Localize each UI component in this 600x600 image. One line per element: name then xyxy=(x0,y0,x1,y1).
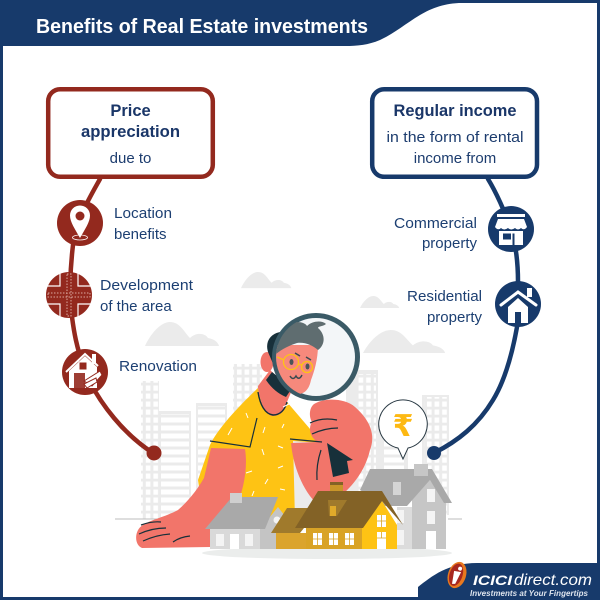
icon: shop xyxy=(488,206,534,252)
left arm xyxy=(136,448,246,548)
regular income box xyxy=(372,89,537,177)
eyebrows and mouth xyxy=(290,353,311,378)
icici logo text: ICICI xyxy=(473,572,513,588)
location benefits label: Location xyxy=(114,205,172,222)
icici logo mark xyxy=(444,559,470,591)
rupee symbol: ₹ xyxy=(393,409,413,444)
rupee speech bubble xyxy=(379,400,427,459)
head seen through lens xyxy=(276,322,326,394)
ear xyxy=(260,352,274,372)
regular income description: in the form of rental xyxy=(386,129,524,146)
right hand finger lines xyxy=(310,419,338,480)
footer banner xyxy=(418,559,600,600)
magnifying lens xyxy=(274,316,358,398)
neck xyxy=(258,370,292,416)
end dot: left xyxy=(146,446,162,460)
panel: regular income xyxy=(372,89,541,460)
commercial label line 2: property xyxy=(422,235,477,252)
collar xyxy=(258,392,287,415)
eyes xyxy=(290,359,310,370)
icon: crossroads xyxy=(46,272,92,318)
icon: renovation xyxy=(62,349,108,395)
shirt flecks xyxy=(228,404,304,496)
hair behind lens xyxy=(267,332,290,366)
illustration: person with magnifying glass xyxy=(136,316,452,559)
development label: Development xyxy=(100,277,194,294)
connector line: right xyxy=(434,179,518,453)
shirt xyxy=(198,388,322,530)
header banner xyxy=(0,0,600,46)
regular income description line 2: income from xyxy=(414,150,496,167)
title: Benefits of Real Estate investments xyxy=(36,16,368,38)
dark arm shadow xyxy=(327,443,353,477)
right sleeve edge xyxy=(290,439,322,442)
left hand finger lines xyxy=(139,522,190,542)
background city buildings xyxy=(115,364,462,520)
glasses xyxy=(277,354,312,372)
regular income heading: Regular income xyxy=(394,102,516,120)
illustration: gray house left xyxy=(205,493,288,549)
left sleeve edge xyxy=(210,418,257,447)
due to text: due to xyxy=(110,150,151,167)
icon: house xyxy=(495,281,541,327)
commercial label: Commercial xyxy=(394,215,477,232)
residential label line 2: property xyxy=(427,309,482,326)
location benefits label line 2: benefits xyxy=(114,226,167,243)
logo tagline: Investments at Your Fingertips xyxy=(470,589,589,598)
residential label: Residential xyxy=(407,288,482,305)
price appreciation box xyxy=(48,89,213,177)
illustration: gray house right xyxy=(360,464,452,549)
face in lens xyxy=(276,345,318,394)
direct.com logo text: direct.com xyxy=(514,572,592,589)
development label line 2: of the area xyxy=(100,298,172,315)
price appreciation heading line 2: appreciation xyxy=(81,123,180,141)
neck shadow xyxy=(266,372,292,397)
background clouds xyxy=(145,272,445,353)
connector line: left xyxy=(70,179,153,453)
panel: price appreciation xyxy=(46,89,213,460)
hair in lens xyxy=(276,322,326,354)
ground shadow xyxy=(202,547,452,559)
right arm xyxy=(291,400,372,505)
illustration: yellow house xyxy=(271,482,403,549)
renovation label: Renovation xyxy=(119,358,197,375)
price appreciation heading: Price xyxy=(110,102,151,120)
icon: location pin xyxy=(57,200,103,246)
end dot: right xyxy=(427,446,441,460)
